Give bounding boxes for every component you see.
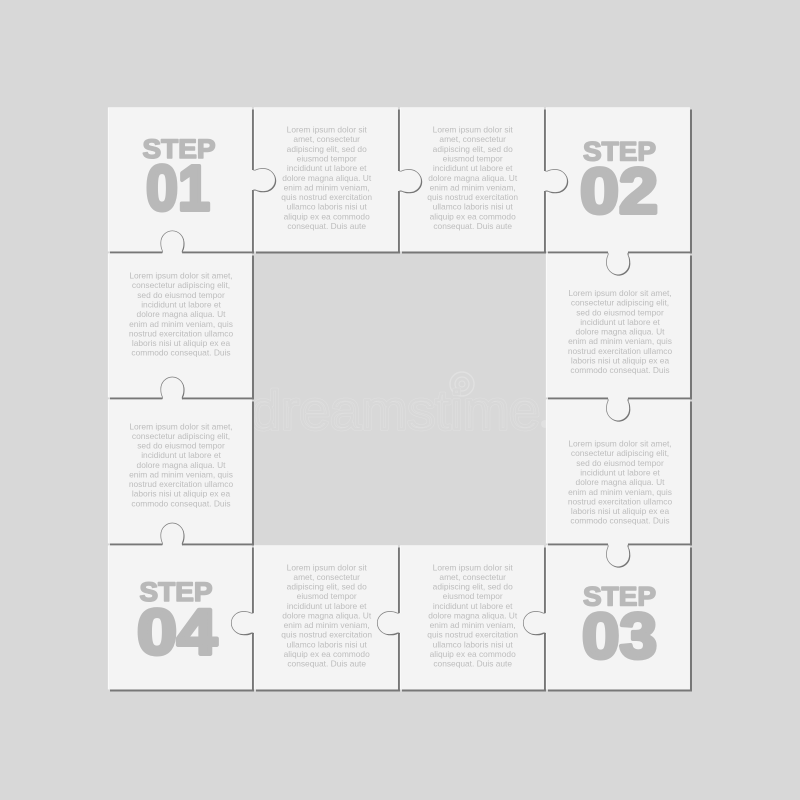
watermark: dreamstime: dreamstime [250, 379, 540, 441]
panel: text top 1: aliquip ex ea commodo [284, 211, 370, 221]
panel: text top 1: enim ad minim veniam, [284, 182, 370, 192]
panel: text top 1: dolore magna aliqua. Ut [282, 173, 372, 183]
panel: text left 1: enim ad minim veniam, quis [129, 319, 233, 329]
panel: text left 2: commodo consequat. Duis [131, 498, 231, 508]
panel: text top 1: adipiscing elit, sed do [287, 144, 367, 154]
panel: text right 2 [546, 399, 692, 546]
panel: text left 1 [108, 253, 254, 400]
panel: text top 2: quis nostrud exercitation [427, 192, 518, 202]
panel: step 01 [108, 107, 254, 254]
panel: text top 1: consequat. Duis aute [287, 221, 366, 231]
panel: step 03: STEP [583, 582, 656, 612]
panel: text top 2: enim ad minim veniam, [430, 182, 516, 192]
panel: text bottom 1 [254, 545, 400, 692]
panel: text left 1: Lorem ipsum dolor sit amet, [129, 271, 233, 281]
panel: text bottom 1: Lorem ipsum dolor sit [287, 562, 367, 572]
panel: text left 1: sed do eiusmod tempor [137, 290, 225, 300]
panel: text bottom 2: enim ad minim veniam, [430, 620, 516, 630]
panel: text right 1: commodo consequat. Duis [570, 365, 670, 375]
panel: text bottom 1: enim ad minim veniam, [284, 620, 370, 630]
panel: text top 2: consequat. Duis aute [433, 221, 512, 231]
panel: text right 2: enim ad minim veniam, quis [568, 487, 672, 497]
panel: text right 1: Lorem ipsum dolor sit amet, [568, 288, 672, 298]
panel: text right 2: incididunt ut labore et [580, 467, 660, 477]
panel: step 04 [108, 545, 254, 692]
number: 02: 02 [580, 155, 658, 227]
panel: text right 2: sed do eiusmod tempor [576, 458, 664, 468]
panel: text left 1: consectetur adipiscing elit, [132, 280, 230, 290]
panel: text bottom 1: aliquip ex ea commodo [284, 649, 370, 659]
number: 01: 01 [146, 152, 210, 224]
panel: text right 1 [546, 253, 692, 400]
panel: text top 2: incididunt ut labore et [433, 163, 513, 173]
panel: text top 1: incididunt ut labore et [287, 163, 367, 173]
panel: text left 1: dolore magna aliqua. Ut [137, 309, 226, 319]
panel: step 04: STEP [140, 577, 212, 607]
panel: text right 2: consectetur adipiscing elit, [571, 448, 669, 458]
panel: text bottom 1: ullamco laboris nisi ut [287, 639, 367, 649]
panel: text bottom 2: quis nostrud exercitation [427, 630, 518, 640]
panel: text left 1: nostrud exercitation ullamco [129, 328, 233, 338]
number: 04: 04 [137, 596, 217, 668]
panel: text left 2: Lorem ipsum dolor sit amet, [129, 421, 233, 431]
panel: text bottom 2: eiusmod tempor [443, 591, 503, 601]
heading: step 01: STEP [142, 134, 216, 164]
panel: text top 2: adipiscing elit, sed do [433, 144, 513, 154]
panel: text bottom 2: aliquip ex ea commodo [430, 649, 516, 659]
panel: text top 1: eiusmod tempor [297, 153, 357, 163]
panel: text left 2: nostrud exercitation ullamco [129, 479, 233, 489]
panel: text top 2: ullamco laboris nisi ut [433, 202, 513, 212]
panel: text bottom 2: incididunt ut labore et [433, 601, 513, 611]
panel: text top 1: ullamco laboris nisi ut [287, 202, 367, 212]
panel: text top 2: eiusmod tempor [443, 153, 503, 163]
panel: text bottom 1: consequat. Duis aute [287, 659, 366, 669]
panel: text right 1: sed do eiusmod tempor [576, 307, 664, 317]
panel: text bottom 2: adipiscing elit, sed do [433, 582, 513, 592]
watermark: dreamstime: dreamstime [250, 379, 540, 441]
panel: text right 2: nostrud exercitation ullamco [568, 496, 672, 506]
panel: text left 1: laboris nisi ut aliquip ex ea [132, 338, 230, 348]
panel: text left 2: incididunt ut labore et [141, 450, 221, 460]
panel: text top 2: amet, consectetur [439, 134, 506, 144]
panel: text top 1: amet, consectetur [293, 134, 360, 144]
panel: text right 1: dolore magna aliqua. Ut [576, 327, 665, 337]
panel: text bottom 2: ullamco laboris nisi ut [433, 639, 513, 649]
panel: text left 1: commodo consequat. Duis [131, 348, 231, 358]
panel: text top 2: Lorem ipsum dolor sit [433, 125, 513, 135]
panel: step 02: STEP [583, 136, 656, 166]
panel: text top 1: quis nostrud exercitation [281, 192, 372, 202]
panel: text right 2: laboris nisi ut aliquip ex ea [571, 506, 669, 516]
panel: text left 2: laboris nisi ut aliquip ex ea [132, 489, 230, 499]
number: 03: 03 [582, 600, 657, 672]
panel: text bottom 2: consequat. Duis aute [433, 659, 512, 669]
panel: text bottom 1: adipiscing elit, sed do [287, 582, 367, 592]
panel: text bottom 2 [400, 545, 546, 692]
panel: text left 1: incididunt ut labore et [141, 299, 221, 309]
panel: text left 2: sed do eiusmod tempor [137, 441, 225, 451]
panel: step 03 [546, 545, 692, 692]
panel: text bottom 1: incididunt ut labore et [287, 601, 367, 611]
panel: text left 2 [108, 399, 254, 546]
puzzle tabs [161, 168, 630, 635]
panel: text bottom 1: quis nostrud exercitation [281, 630, 372, 640]
panel: text right 2: Lorem ipsum dolor sit amet, [568, 439, 672, 449]
panel: text bottom 1: amet, consectetur [293, 572, 360, 582]
panel: text top 1: Lorem ipsum dolor sit [287, 125, 367, 135]
panel: step 02 [546, 107, 692, 254]
panel: text right 2: dolore magna aliqua. Ut [576, 477, 665, 487]
panel: text bottom 2: dolore magna aliqua. Ut [428, 610, 518, 620]
panel: text left 2: enim ad minim veniam, quis [129, 469, 233, 479]
panel: text bottom 1: dolore magna aliqua. Ut [282, 610, 372, 620]
panel: text left 2: consectetur adipiscing elit, [132, 431, 230, 441]
panel: text right 1: nostrud exercitation ullamco [568, 346, 672, 356]
panel: text left 2: dolore magna aliqua. Ut [137, 460, 226, 470]
panel: text bottom 2: Lorem ipsum dolor sit [433, 562, 513, 572]
panel: text right 1: laboris nisi ut aliquip ex ea [571, 355, 669, 365]
panel: text right 1: enim ad minim veniam, quis [568, 336, 672, 346]
panel: text top 2: aliquip ex ea commodo [430, 211, 516, 221]
panel: text bottom 1: eiusmod tempor [297, 591, 357, 601]
panel: text top 1 [254, 107, 400, 254]
panel: text top 2: dolore magna aliqua. Ut [428, 173, 518, 183]
panel: text right 1: consectetur adipiscing elit, [571, 298, 669, 308]
panel: text top 2 [400, 107, 546, 254]
panel: text right 1: incididunt ut labore et [580, 317, 660, 327]
panel: text bottom 2: amet, consectetur [439, 572, 506, 582]
panel: text right 2: commodo consequat. Duis [570, 516, 670, 526]
